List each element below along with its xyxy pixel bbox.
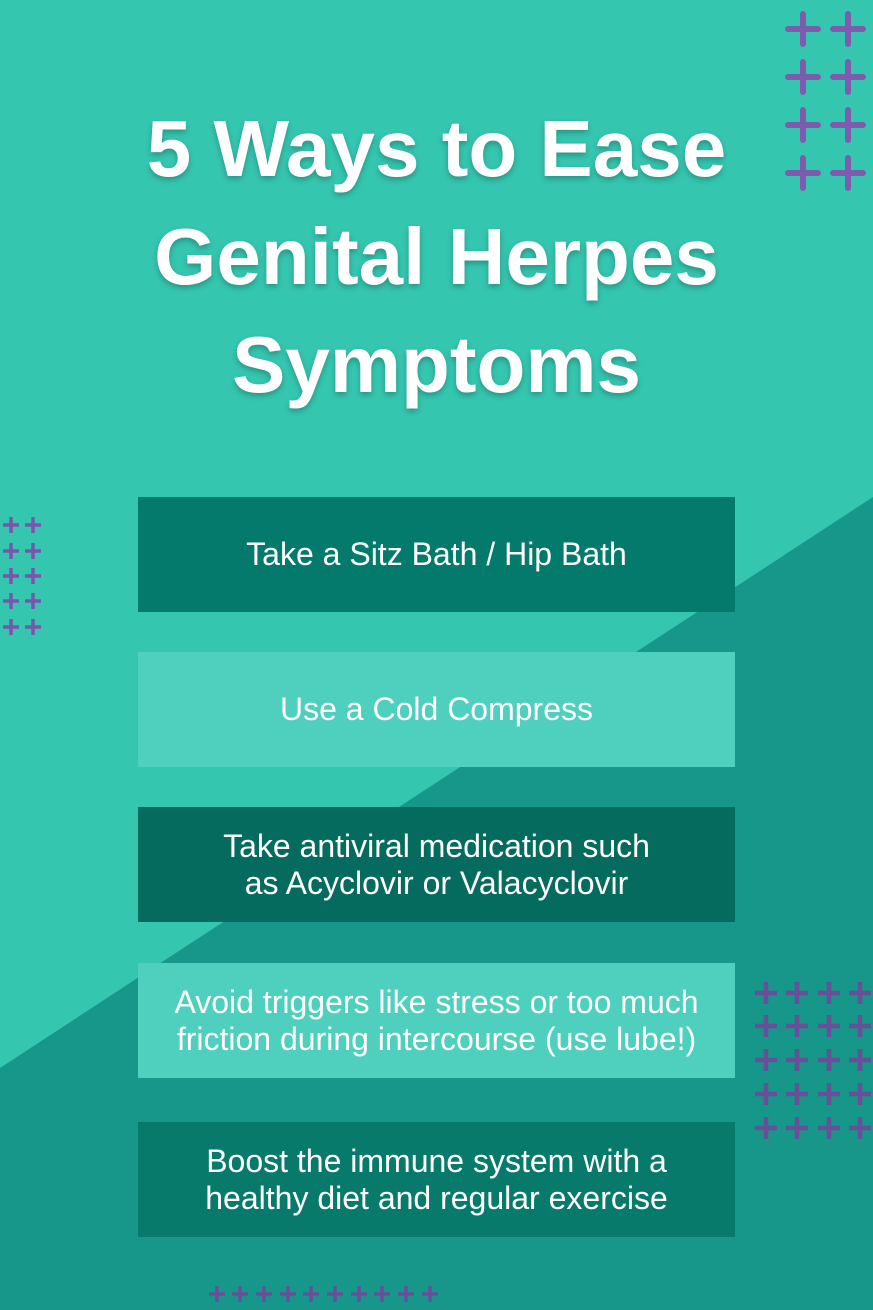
box 4: avoid triggers: friction during intercourse (use lube!) xyxy=(177,1020,696,1056)
title xyxy=(147,104,726,414)
box 1: sitz bath: Take a Sitz Bath / Hip Bath xyxy=(246,536,627,572)
title: 5 Ways to Ease xyxy=(147,104,726,193)
box 3: antiviral medication xyxy=(138,807,735,922)
box 5: boost immune system xyxy=(138,1122,735,1237)
box 3: antiviral medication: Take antiviral medication such xyxy=(223,828,650,864)
box 1: sitz bath xyxy=(138,497,735,612)
box 2: cold compress xyxy=(138,652,735,767)
box 3: antiviral medication: as Acyclovir or Valacyclovir xyxy=(245,864,628,900)
title: Genital Herpes xyxy=(154,212,719,301)
box 5: boost immune system: Boost the immune system with a xyxy=(206,1142,667,1178)
box 2: cold compress: Use a Cold Compress xyxy=(280,691,593,727)
box 5: boost immune system: healthy diet and regular exercise xyxy=(205,1180,668,1216)
title: Symptoms xyxy=(232,320,641,409)
box 4: avoid triggers: Avoid triggers like stress or too much xyxy=(174,984,699,1020)
box 4: avoid triggers xyxy=(138,963,735,1078)
